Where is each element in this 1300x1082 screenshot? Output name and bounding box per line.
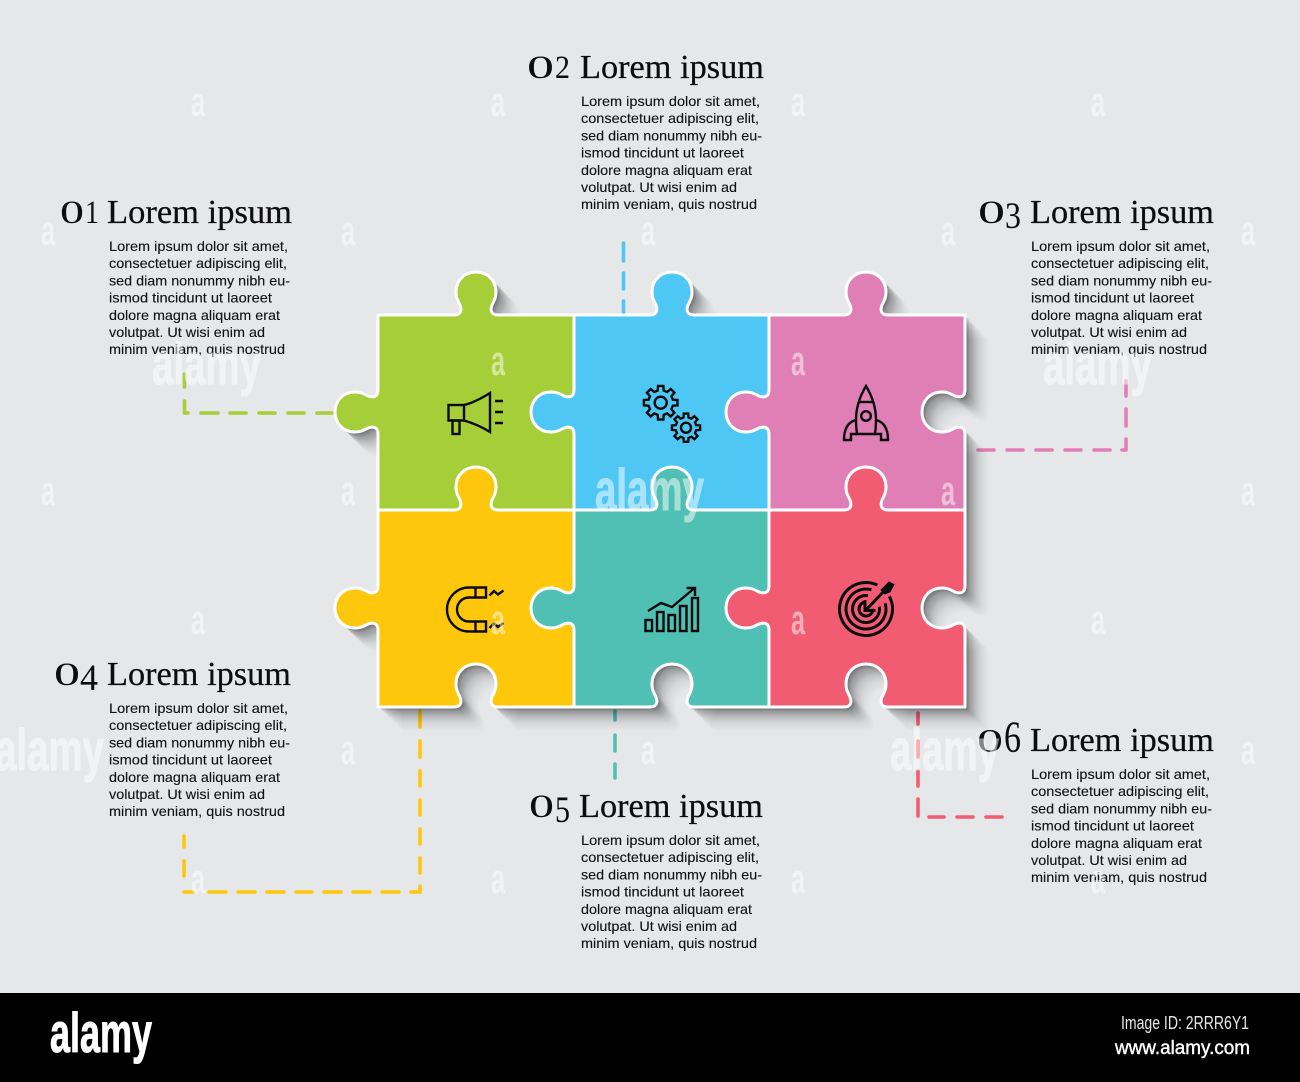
- connector: 06 red dashed line: [918, 713, 1002, 817]
- long shadow of puzzle: [336, 273, 989, 731]
- number 01: [60, 195, 99, 231]
- number 04: 0: [54, 657, 80, 693]
- text block 05: [529, 788, 763, 951]
- body 05: Lorem ipsum dolor sit amet,: [581, 832, 760, 848]
- number 04: [54, 657, 98, 699]
- puzzle piece: teal: [531, 467, 769, 707]
- body 02: dolore magna aliquam erat: [581, 162, 752, 178]
- body 06: Lorem ipsum dolor sit amet,: [1031, 766, 1210, 782]
- watermarks: alamy: [890, 718, 999, 783]
- watermarks: a: [791, 855, 805, 902]
- body 01: volutpat. Ut wisi enim ad: [109, 324, 265, 340]
- body 05: volutpat. Ut wisi enim ad: [581, 918, 737, 934]
- body 06: consectetuer adipiscing elit,: [1031, 783, 1209, 799]
- body 06: sed diam nonummy nibh eu-: [1031, 800, 1212, 816]
- body 06: [1031, 766, 1212, 885]
- body 04: [109, 700, 290, 819]
- puzzle piece: blue: [531, 272, 769, 510]
- watermarks: a: [1241, 467, 1255, 514]
- watermarks: a: [341, 467, 355, 514]
- watermarks: a: [791, 78, 805, 125]
- text block 03: [978, 194, 1214, 357]
- watermarks: a: [191, 596, 205, 643]
- watermarks: a: [941, 467, 955, 514]
- body 05: ismod tincidunt ut laoreet: [581, 884, 744, 900]
- watermarks: a: [641, 207, 655, 254]
- body 01: dolore magna aliquam erat: [109, 307, 280, 323]
- body 02: sed diam nonummy nibh eu-: [581, 127, 762, 143]
- number 02: 0: [527, 50, 554, 86]
- number 02: [527, 50, 570, 86]
- body 02: minim veniam, quis nostrud: [581, 196, 757, 212]
- connector: 04 yellow dashed line: [184, 711, 420, 892]
- body 05: consectetuer adipiscing elit,: [581, 849, 759, 865]
- heading 05: Lorem ipsum: [579, 788, 763, 825]
- watermarks: a: [1091, 78, 1105, 125]
- body 02: volutpat. Ut wisi enim ad: [581, 179, 737, 195]
- number 02: 2: [555, 50, 570, 86]
- puzzle piece: green: [335, 272, 574, 510]
- watermarks: [0, 78, 1255, 902]
- number 05: 0: [529, 789, 554, 825]
- body 01: consectetuer adipiscing elit,: [109, 255, 287, 271]
- text block 06: [977, 712, 1214, 885]
- body 04: consectetuer adipiscing elit,: [109, 717, 287, 733]
- icon: target: [830, 573, 902, 645]
- watermarks: alamy: [1043, 332, 1152, 397]
- body 01: Lorem ipsum dolor sit amet,: [109, 238, 288, 254]
- body 04: ismod tincidunt ut laoreet: [109, 752, 272, 768]
- watermarks: a: [1091, 855, 1105, 902]
- body 06: ismod tincidunt ut laoreet: [1031, 818, 1194, 834]
- watermarks: a: [191, 78, 205, 125]
- icon: rocket: [844, 386, 888, 440]
- watermarks: a: [641, 726, 655, 773]
- body 02: ismod tincidunt ut laoreet: [581, 145, 744, 161]
- number 01: 0: [60, 195, 84, 231]
- footer logo: alamy: [50, 1001, 152, 1064]
- body 03: Lorem ipsum dolor sit amet,: [1031, 238, 1210, 254]
- watermarks: a: [1241, 207, 1255, 254]
- watermarks: a: [191, 855, 205, 902]
- body 03: minim veniam, quis nostrud: [1031, 341, 1207, 357]
- icon: magnet: [447, 588, 504, 632]
- body 02: consectetuer adipiscing elit,: [581, 110, 759, 126]
- watermarks: alamy: [152, 332, 261, 397]
- number 05: 5: [555, 790, 570, 831]
- body 05: sed diam nonummy nibh eu-: [581, 866, 762, 882]
- heading 04: Lorem ipsum: [107, 656, 291, 693]
- icon: megaphone: [448, 393, 503, 434]
- body 06: minim veniam, quis nostrud: [1031, 869, 1207, 885]
- puzzle piece: yellow: [335, 467, 574, 707]
- number 05: [529, 789, 570, 831]
- body 01: [109, 238, 290, 357]
- watermarks: a: [791, 337, 805, 384]
- connector: 01 green dashed line: [184, 374, 332, 413]
- connector: 05 teal dashed line: [613, 711, 617, 778]
- heading 03: Lorem ipsum: [1030, 194, 1214, 231]
- number 06: 6: [1004, 712, 1021, 762]
- body 04: dolore magna aliquam erat: [109, 769, 280, 785]
- footer bar: [0, 993, 1300, 1082]
- watermarks: a: [1241, 726, 1255, 773]
- watermarks: a: [341, 726, 355, 773]
- number 01: 1: [85, 195, 99, 231]
- text block 01: [60, 194, 292, 357]
- watermarks: a: [491, 596, 505, 643]
- number 04: 4: [80, 658, 98, 699]
- heading 01: Lorem ipsum: [107, 194, 292, 231]
- body 02: Lorem ipsum dolor sit amet,: [581, 93, 760, 109]
- image id: Image ID: 2RRR6Y1: [1121, 1013, 1249, 1033]
- heading 06: Lorem ipsum: [1030, 722, 1214, 759]
- body 04: volutpat. Ut wisi enim ad: [109, 786, 265, 802]
- watermarks: a: [491, 337, 505, 384]
- puzzle piece: red: [726, 467, 965, 707]
- connector: 02 blue dashed line: [622, 243, 625, 313]
- body 06: volutpat. Ut wisi enim ad: [1031, 852, 1187, 868]
- number 03: 3: [1005, 196, 1021, 237]
- watermarks: a: [341, 207, 355, 254]
- body 04: minim veniam, quis nostrud: [109, 803, 285, 819]
- connector: 03 pink dashed line: [978, 381, 1126, 450]
- puzzle piece: pink: [726, 272, 965, 510]
- watermarks: a: [791, 596, 805, 643]
- website: www.alamy.com: [1114, 1038, 1250, 1059]
- watermarks: a: [491, 855, 505, 902]
- number 06: 0: [977, 724, 1003, 760]
- number 06: [977, 712, 1021, 762]
- number 03: [978, 195, 1021, 237]
- watermarks: a: [491, 78, 505, 125]
- icon: gears: [644, 386, 700, 442]
- body 01: minim veniam, quis nostrud: [109, 341, 285, 357]
- body 04: sed diam nonummy nibh eu-: [109, 734, 290, 750]
- body 02: [581, 93, 762, 212]
- body 03: dolore magna aliquam erat: [1031, 307, 1202, 323]
- body 03: ismod tincidunt ut laoreet: [1031, 290, 1194, 306]
- puzzle chart: [335, 272, 965, 707]
- number 03: 0: [978, 195, 1005, 231]
- watermarks: a: [1091, 596, 1105, 643]
- body 01: sed diam nonummy nibh eu-: [109, 272, 290, 288]
- body 03: volutpat. Ut wisi enim ad: [1031, 324, 1187, 340]
- body 01: ismod tincidunt ut laoreet: [109, 290, 272, 306]
- watermarks: a: [41, 207, 55, 254]
- text block 02: [527, 49, 764, 212]
- watermarks: a: [41, 467, 55, 514]
- body 06: dolore magna aliquam erat: [1031, 835, 1202, 851]
- icon: growth chart: [646, 588, 698, 631]
- body 05: dolore magna aliquam erat: [581, 901, 752, 917]
- text block 04: [54, 656, 291, 819]
- body 03: consectetuer adipiscing elit,: [1031, 255, 1209, 271]
- body 04: Lorem ipsum dolor sit amet,: [109, 700, 288, 716]
- watermarks: a: [941, 207, 955, 254]
- watermarks: alamy: [595, 458, 704, 523]
- body 05: minim veniam, quis nostrud: [581, 935, 757, 951]
- body 03: sed diam nonummy nibh eu-: [1031, 272, 1212, 288]
- body 05: [581, 832, 762, 951]
- body 03: [1031, 238, 1212, 357]
- heading 02: Lorem ipsum: [580, 49, 764, 86]
